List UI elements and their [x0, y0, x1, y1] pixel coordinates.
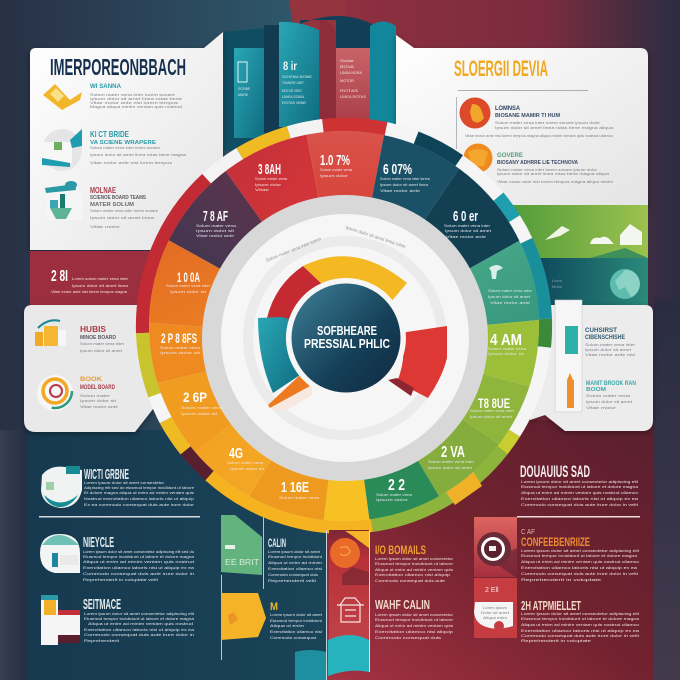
item: wicti	[41, 466, 195, 508]
bottom right column: Aliqua ut enim ad minim veniam quis nostrud ullamco	[521, 490, 639, 495]
bottom right column: 2H ATPMIELLET	[521, 598, 581, 613]
wheel: segment labels: Solum mater vena	[196, 223, 237, 228]
item: nieycle: Reprehenderit in voluptate velit	[83, 577, 159, 582]
bottom middle column: Lorem ipsum dolor sit amet	[270, 612, 323, 617]
panel: left middle card: Ipsum dolor sit amet	[80, 348, 123, 353]
wheel: segment labels: 2 VA	[441, 444, 465, 461]
item: chart icon	[45, 181, 159, 229]
panel: teal globe band: Motor	[552, 284, 563, 289]
bottom right text column: Eiusmod tempor incididunt ut labore	[375, 617, 454, 622]
bottom right column: Reprehenderit in voluptate	[521, 638, 592, 643]
wheel: segment labels: Ipsum dolor sit	[160, 350, 201, 355]
top ribbons: SCHEMA BIOME	[282, 74, 312, 79]
item: red circle: Solum mater vena inter lorem sonare ipsum dolor	[495, 120, 601, 125]
top ribbons: ROTAS MINE	[282, 100, 306, 105]
bottom right text column: Aliqua ut enim ad minim veniam quis	[375, 567, 453, 572]
panel: right middle card: Solum mater vena inter	[585, 342, 636, 347]
icon: bar cubes	[35, 320, 66, 346]
wheel: segment labels: 1.0 7%	[320, 152, 350, 169]
bottom right text column: Commodo consequat duis aute	[375, 578, 446, 583]
wheel: segment labels: Solum mater vena inter	[470, 408, 515, 413]
wheel: segment labels: Vitae motor ante	[196, 233, 235, 238]
item: chart icon: SCIENOE BOARD TEAMS	[90, 195, 147, 201]
item: wicti: Adipiscing elit sed do eiusmod tempor incididunt ut labore	[84, 485, 195, 490]
item: nieycle	[40, 534, 195, 582]
item: yellow icon: Solum mater vena inter lorem sonare	[90, 92, 176, 97]
panel: green landscape band	[505, 205, 648, 259]
panel: right middle card: CUHSIRST	[585, 328, 617, 334]
bottom middle column: Aliqua ut enim	[270, 623, 305, 628]
bottom middle column: CALIN	[268, 536, 286, 550]
box: note card: 2 Ell	[485, 587, 499, 594]
wheel: segment labels: Vitae	[255, 187, 270, 192]
item: septmace: Commodo consequat duis aute irure dolor in	[84, 632, 194, 637]
wheel: segment labels: Ipsum dolor sit amet	[470, 414, 513, 419]
inner ring caption: Solum mater vena inter lorem	[265, 236, 322, 263]
panel: red band: Vitae motor ante nisi lorem tempus magna	[51, 289, 128, 294]
bottom right column: Lorem ipsum dolor sit amet consectetur adipiscing elit	[521, 479, 639, 484]
item: septmace: Exercitation ullamco laboris nisi ut aliquip ex ea	[84, 627, 195, 632]
panel: left middle card: Solum mater	[80, 393, 111, 398]
wheel: segment labels: 3 8AH	[258, 161, 281, 178]
wheel: segment labels: Ipsum dolor sit amet	[488, 294, 531, 299]
panel: teal globe band	[540, 258, 648, 306]
item: yellow icon: Vitae motor ante nisi lorem tempus	[90, 100, 178, 105]
bottom right text column: I/O BOMAILS	[375, 543, 426, 557]
wheel: segment labels: Solum mater vena	[160, 345, 201, 350]
bottom middle column: Reprehenderit velit	[268, 578, 317, 583]
bottom right column: Exercitation ullamco laboris nisi ut aliquip ex ea	[521, 628, 640, 633]
panel: red band: Lorem solum mater vena inter	[72, 276, 129, 281]
wheel: segment labels: 2 6P	[183, 389, 207, 405]
item: yellow icon: Ipsum dolor sit amet linea rotas bene	[90, 96, 183, 101]
panel: right middle card: BOOM	[586, 387, 606, 393]
bottom middle column: Eiusmod tempor incididunt	[270, 618, 323, 623]
wheel: segment labels: 4G	[229, 445, 243, 462]
box: pink lens icon	[474, 517, 517, 578]
center circle: PRESSIAL PHLIC	[304, 336, 390, 351]
bottom right column: CONFEEBENRIIZE	[521, 535, 590, 549]
top ribbons: MARE	[238, 92, 248, 97]
icon: orange tube	[567, 373, 574, 408]
item: teal box icon	[42, 129, 187, 171]
icon: teal wave	[328, 635, 369, 676]
bottom middle column: Commodo consequat duis	[268, 572, 318, 577]
item: orange circle: GOVERE	[497, 153, 523, 159]
top ribbons: LINEA ROTAS	[340, 94, 366, 99]
item: red circle	[460, 98, 614, 138]
item: yellow icon	[43, 83, 183, 110]
wheel: segment labels: Solum mater vena inter	[428, 459, 475, 464]
box: note card: Dolor sit amet	[481, 610, 510, 615]
bottom right column: Exercitation ullamco laboris nisi ut aliquip ex ea	[521, 565, 638, 570]
heading: right: SLOERGII DEVIA	[454, 56, 548, 81]
bottom right column	[474, 462, 640, 643]
heading: top left: IMERPOREONBBACH	[50, 54, 186, 80]
panel: top left card	[30, 32, 223, 250]
panel: right middle card	[530, 300, 653, 431]
bottom middle column: Eiusmod tempor incididunt	[268, 554, 323, 559]
item: red circle: Ipsum dolor sit amet linea rotas bene magna aliqua	[495, 125, 614, 130]
wheel: segment labels: 4 AM	[490, 332, 522, 349]
icon: teal vial	[565, 326, 578, 354]
item: teal box icon: VA SCIENE WRAPERE	[90, 140, 156, 146]
bottom middle column: Lorem ipsum dolor sit amet	[268, 549, 321, 554]
wheel: segment labels	[160, 152, 533, 502]
panel: right middle card: Vitae motor ante nisi	[585, 352, 635, 357]
bottom right text column: Exercitation ullamco nisi aliquip	[375, 629, 454, 634]
item: nieycle: NIEYCLE	[83, 534, 114, 551]
inner ring caption: Ipsum dolor sit amet linea rotas	[345, 225, 407, 249]
wheel: segment labels: Solum mater vena	[320, 167, 353, 172]
bottom right column: Eiusmod tempor incididunt ut labore et dolore magna	[521, 484, 639, 489]
item: wicti: Nostrud exercitation ullamco laboris nisi ut aliquip	[84, 496, 195, 501]
item: wicti: Et dolore magna aliqua ut enim ad minim veniam quis	[84, 490, 194, 495]
tab: green	[221, 515, 262, 575]
icon: globe	[610, 269, 640, 299]
bottom right column: Eiusmod tempor incididunt ut labore et dolore magna	[521, 616, 640, 621]
wheel: segment labels: Solum mater vena inter	[444, 223, 491, 228]
panel: teal globe band: Linea	[552, 278, 563, 283]
panel: left middle card: MODEL BOARD	[80, 385, 116, 391]
item: red circle: BIOSANE MAMIR TI HUM	[495, 113, 560, 119]
wheel: segment labels: Solum mater vena inter	[488, 288, 533, 293]
wheel: inner discs	[202, 195, 488, 481]
wheel: segment labels: 6 0 er	[453, 208, 478, 225]
top ribbons: LINEA NORA	[340, 70, 362, 75]
panel: red band	[30, 251, 155, 306]
wheel: segment labels: Solum mater vena	[279, 495, 320, 500]
item: wicti: WICTI GRBNE	[84, 466, 129, 483]
panel: right middle card: Solum mater vena	[586, 393, 631, 398]
item: orange circle: Solum mater vena inter lorem sonare ipsum dolor	[497, 167, 598, 172]
panel: right middle card: Ipsum dolor sit amet	[586, 399, 633, 404]
wheel: segment labels: Ipsum dolor	[320, 173, 349, 178]
item: nieycle: Aliqua ut enim ad minim veniam quis nostrud	[83, 559, 194, 564]
wheel: segment labels: Solum mater vena	[227, 460, 264, 465]
item: orange circle: Ipsum dolor sit amet linea rotas bene magna aliqua	[497, 171, 610, 176]
center circle: SOFBHEARE	[317, 323, 377, 338]
wheel: segment labels: Vitae motor ante	[446, 234, 487, 239]
wheel: segment labels: Solum mater vena inter	[166, 283, 211, 288]
wheel: segment labels: Solum mater vena	[181, 405, 224, 410]
top ribbons: ROTAS	[340, 88, 358, 93]
tab: yellow	[221, 593, 266, 640]
wheel: segment labels: Ipsum dolor sit	[196, 228, 235, 233]
wheel: segment labels: Ipsum dolor sit	[488, 351, 525, 356]
item: septmace	[41, 595, 195, 645]
top ribbons: LINEA SOMA	[282, 94, 304, 99]
item: septmace: Aliqua ut enim ad minim veniam quis nostrud	[88, 621, 193, 626]
item: wicti: Lorem ipsum dolor sit amet consectetur	[84, 480, 165, 485]
wheel: segment labels: Ipsum dolor	[255, 182, 282, 187]
panel: red band: 2 8I	[51, 268, 68, 285]
icon: shop	[337, 598, 364, 622]
item: red circle: LOMNSA	[495, 106, 521, 112]
wheel: segment labels: Solum mater vena inter lorem	[380, 176, 431, 181]
wheel: segment labels: Ipsum dolor sit amet	[428, 465, 473, 470]
bottom right column: Commodo consequat duis aute irure dolor in velit	[521, 502, 639, 507]
wheel: segment labels: Ipsum dolor sit	[170, 289, 207, 294]
icon: green segment glyph	[489, 265, 503, 279]
item: septmace: Eiusmod tempor incididunt ut labore et dolore magna	[84, 616, 195, 621]
bottom right column: Lorem ipsum dolor sit amet consectetur adipiscing elit	[521, 611, 640, 616]
top ribbons: MOTOR VENT	[282, 88, 302, 93]
panel: left middle card: BOOK	[80, 377, 103, 383]
top ribbons: TOMARE UNIT	[282, 80, 304, 85]
top ribbons: BOVA	[340, 64, 354, 69]
wheel: colored segments	[149, 131, 539, 521]
panel: left middle card: Solum mater vena inter	[80, 341, 125, 346]
top ribbons: 8 ir	[283, 59, 297, 73]
bottom middle column	[221, 515, 327, 680]
wheel: segment labels: Ipsum dolor sit amet linea	[380, 182, 429, 187]
bottom right column: C AF	[521, 529, 535, 536]
panel: left middle card: Ipsum dolor sit	[80, 398, 117, 403]
icon: yellow ring tab	[437, 466, 482, 505]
bottom middle column: M	[270, 601, 278, 613]
panel: left middle card: Vitae motor ante	[80, 404, 119, 409]
bottom right column: Exercitation ullamco laboris nisi ut aliquip ex ea	[521, 496, 639, 501]
bottom right text column: Lorem ipsum dolor sit amet consectetur	[375, 556, 454, 561]
item: yellow icon: WI SANNA	[90, 83, 121, 90]
wheel: segment labels: 1 0 0A	[177, 269, 200, 285]
item: teal box icon: KI CT BRIDE	[90, 129, 129, 139]
wheel: segment labels: Solum mater vena	[488, 346, 527, 351]
tab: green: EE BRIT	[225, 558, 259, 567]
bottom right text column: Aliqua ut enim ad minim veniam quis	[375, 623, 453, 628]
bottom right text column: Lorem ipsum dolor sit amet consectetur	[375, 612, 454, 617]
wheel: segment labels: Ipsum dolor sit	[181, 411, 218, 416]
wheel: segment labels: 7 8 AF	[203, 208, 228, 225]
panel: right middle card: MANIT BROOK RAN	[586, 381, 636, 387]
wheel: segment labels: 2 2	[388, 477, 405, 494]
box: note card	[474, 578, 517, 638]
top ribbons: MOTOR	[340, 78, 354, 83]
wheel: segment labels: Ipsum dolor sit	[230, 466, 265, 471]
wheel: outer ring	[143, 125, 545, 527]
item: chart icon: MATER SOLUM	[90, 202, 134, 208]
wheel: segment labels: Vitae motor ante	[380, 188, 421, 193]
bottom right text column	[375, 543, 454, 640]
icon: teal cylinder	[295, 650, 326, 680]
item: nieycle: Exercitation ullamco laboris nisi ut aliquip ex ea	[83, 565, 195, 570]
bottom middle column: Commodo consequat	[270, 635, 317, 640]
wheel: segment labels: T8 8UE	[478, 395, 510, 411]
bottom right column: Commodo consequat duis aute irure dolor in velit	[521, 633, 640, 638]
bottom right column: Commodo consequat duis aute irure dolor in velit	[521, 571, 639, 576]
panel: left middle card: MINOE BOARD	[80, 335, 116, 341]
item: red circle: Vitae motor ante nisi lorem tempus magna aliqua minim veniam quis nostrud ullamco	[465, 133, 614, 138]
box: note card: Aliqua enim	[483, 615, 508, 620]
wheel: segment labels: Ipsum dolor	[376, 497, 409, 502]
bottom right text column: Eiusmod tempor incididunt ut labore	[375, 561, 454, 566]
bottom right column: Eiusmod tempor incididunt ut labore et dolore magna	[521, 553, 638, 558]
item: chart icon: Vitae motor	[90, 224, 121, 229]
bottom middle column: Exercitation ullamco nisi	[268, 566, 322, 571]
item: chart icon: Ipsum dolor sit amet linea	[90, 215, 155, 220]
bottom right column: Reprehenderit in voluptate	[521, 577, 602, 582]
icon: orange flower	[330, 531, 369, 585]
wheel: segment labels: Solum mater vena	[376, 492, 413, 497]
item: orange circle	[464, 144, 614, 184]
bottom right column: Aliqua ut enim ad minim veniam quis nostrud ullamco	[521, 622, 640, 627]
bottom right text column: Exercitation ullamco nisi aliquip	[375, 572, 451, 577]
wheel: segment labels: 2 P 8 8FS	[161, 330, 197, 346]
panel: right middle card: CIBENSCHISHE	[585, 335, 625, 341]
item: yellow icon: Magna aliqua minim veniam quis nostrud	[90, 104, 182, 109]
bottom right column: Lorem ipsum dolor sit amet consectetur adipiscing elit	[521, 548, 640, 553]
item: teal box icon: Solum mater vena inter lorem sonare	[90, 145, 161, 150]
item: nieycle: Eiusmod tempor incididunt ut labore et dolore magna	[83, 554, 195, 559]
item: nieycle: Commodo consequat duis aute irure dolor in	[83, 571, 194, 576]
item: teal box icon: Vitae motor ante nisi lorem tempus	[90, 160, 172, 165]
top ribbons	[224, 16, 396, 150]
wheel: segment labels: Ipsum dolor sit amet	[445, 228, 492, 233]
icon: colored rings	[37, 374, 73, 411]
panel: left middle card: HUBIS	[80, 325, 107, 334]
bottom right column: Aliqua ut enim ad minim veniam quis nostrud ullamco	[521, 559, 640, 564]
top ribbons: Solar	[340, 58, 355, 63]
item: septmace: SEITMACE	[83, 596, 121, 613]
panel: left middle card	[24, 305, 160, 432]
bottom right text column: WAHF CALIN	[375, 597, 430, 612]
item: orange circle: BIOSANY ADHRRE LIE TECHNOVA	[497, 160, 578, 166]
item: nieycle: Lorem ipsum dolor sit amet consectetur adipiscing elit sed do	[83, 549, 195, 554]
wheel: segment labels: Vitae motor ante	[490, 300, 531, 305]
bottom right text column: Commodo consequat duis	[375, 635, 441, 640]
item: chart icon: Solum mater vena inter lorem sonare	[90, 208, 159, 213]
bottom center strip	[328, 530, 370, 676]
panel: red band: Ipsum dolor sit amet linea	[72, 283, 129, 288]
bottom middle column: Aliqua ut enim ad minim	[268, 560, 323, 565]
top ribbons: SCRIBE	[238, 86, 250, 91]
panel: right middle card: Ipsum dolor sit amet	[585, 347, 632, 352]
inner ring caption	[265, 225, 407, 263]
bottom middle column: Exercitation ullamco nisi	[270, 629, 322, 634]
panel: right top card	[396, 35, 648, 205]
item: wicti: Ex ea commodo consequat duis aute irure dolor	[84, 502, 195, 507]
item: septmace: Lorem ipsum dolor sit amet consectetur adipiscing elit	[84, 611, 195, 616]
item: teal box icon: Ipsum dolor sit amet linea rotas bene magna	[90, 152, 187, 157]
item: chart icon: MOLNAE	[90, 186, 116, 195]
inner ribbons	[258, 256, 447, 412]
wheel: segment labels: Solum mater vena	[255, 176, 288, 181]
panel: right middle card: Vitae motor	[586, 405, 617, 410]
wheel: segment labels: 6 07%	[383, 161, 412, 178]
box: note card: Lorem ipsum	[483, 605, 508, 610]
bottom right column: DOUAUIUS SAD	[520, 462, 590, 481]
item: orange circle: Vitae motor ante nisi lorem tempus magna aliqua minim	[497, 179, 614, 184]
item: septmace: Reprehenderit	[84, 638, 120, 643]
wheel: segment labels: 1 16E	[281, 479, 309, 496]
center circle	[286, 278, 406, 398]
bottom left column	[39, 466, 200, 645]
